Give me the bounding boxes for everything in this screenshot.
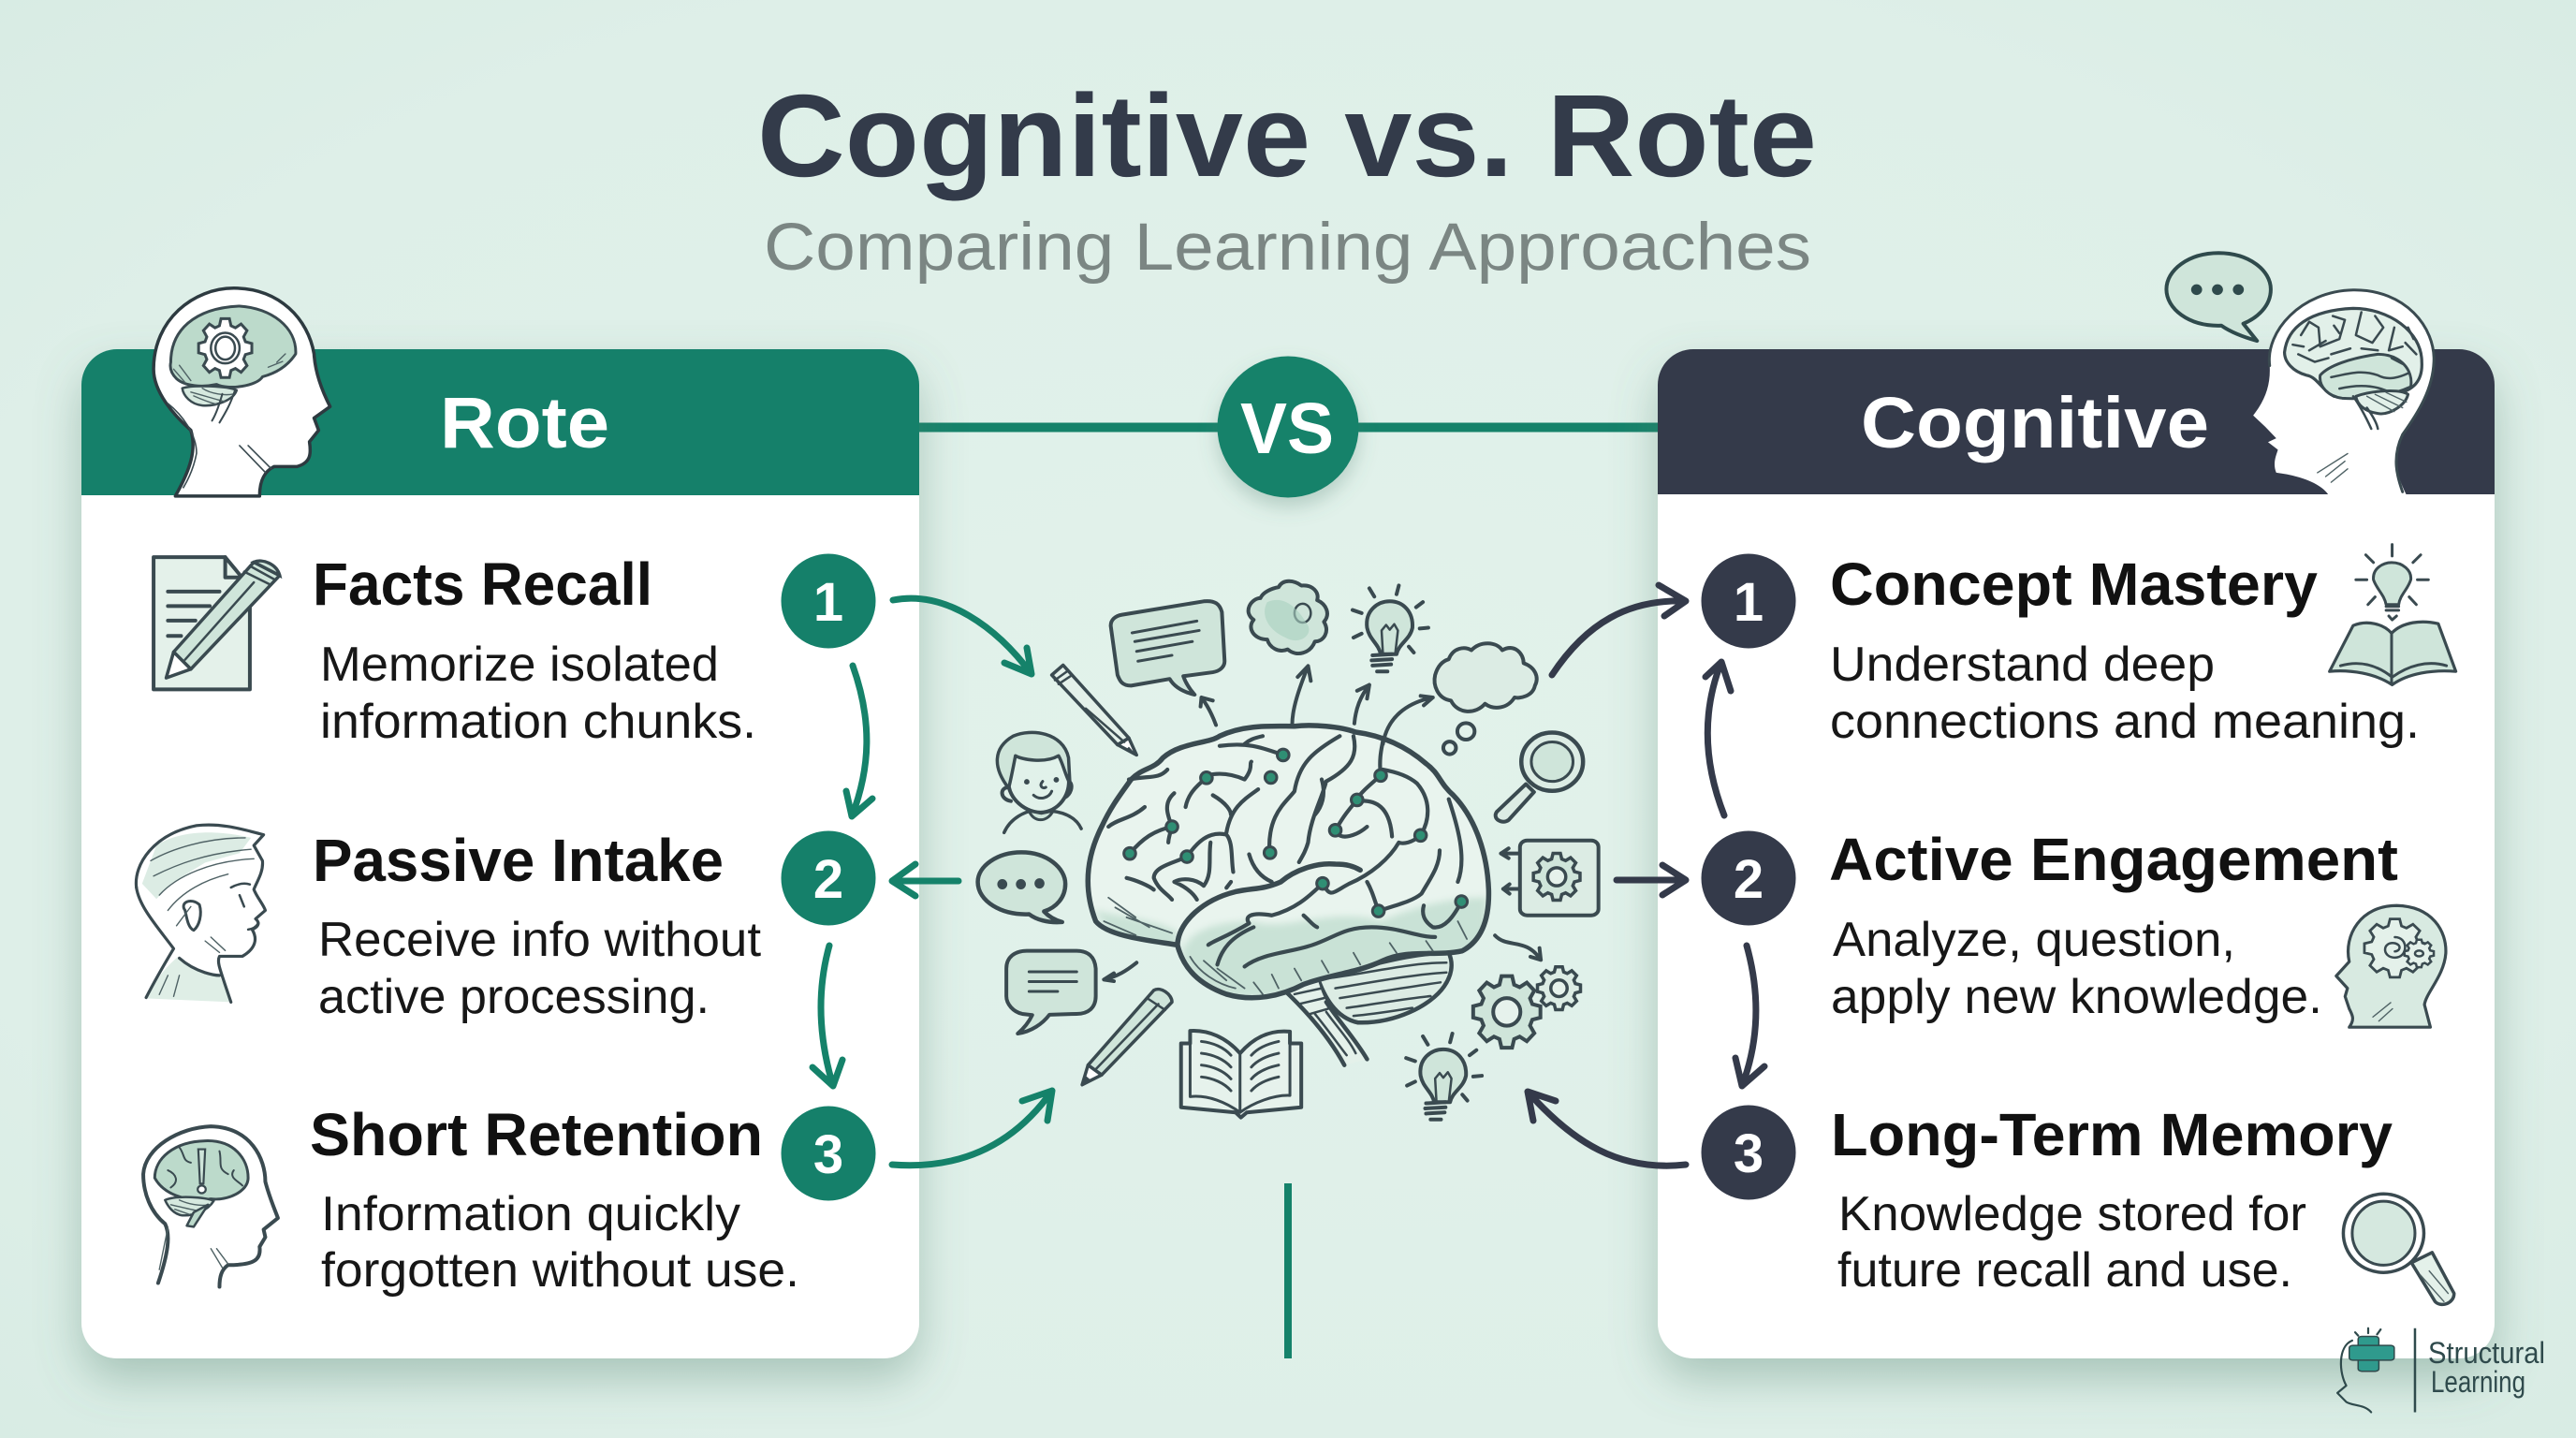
step badge 3 [1702,1105,1795,1200]
item: long-term memory [1702,1101,2454,1304]
step badge 2 [781,831,876,925]
long-term memory description: future recall and use. [1837,1243,2292,1298]
icon: thought cloud [1435,643,1537,755]
item: facts recall [154,550,876,749]
step badge 1 [781,554,876,648]
cognitive heading: Cognitive [1861,383,2209,463]
icon: pencil lower [1082,990,1172,1085]
arrow: brain to cognitive 2 [1617,865,1686,895]
arrow: brain to rote 2 [892,864,959,896]
icon: speech lines lower [1006,951,1096,1034]
item: short retention [143,1101,876,1298]
small arrows out of brain [1104,666,1541,981]
subtitle: Comparing Learning Approaches [764,211,1811,285]
step badge 2 [1702,831,1795,925]
long-term memory description: Knowledge stored for [1838,1187,2306,1241]
icon: boy profile [136,825,265,1002]
central brain illustration [978,581,1599,1120]
logo: structural learning: Learning [2431,1365,2525,1399]
item: passive intake [136,825,876,1024]
short retention description: forgotten without use. [321,1243,799,1298]
concept mastery description: Understand deep [1830,638,2215,692]
icon: speech note [1111,601,1224,695]
icon: cognitive head with detailed brain [2253,290,2434,495]
step badge 2: 2 [1734,849,1764,910]
short retention description: Information quickly [321,1187,740,1241]
icon: bulb lower [1406,1034,1482,1120]
icon: open book [1181,1031,1301,1118]
arrow: rote 1 to brain [893,598,1032,674]
step badge 3: 3 [813,1124,843,1185]
rote heading: Rote [440,383,609,463]
passive intake description: active processing. [318,970,710,1024]
facts recall description: information chunks. [320,695,756,749]
facts recall heading: Facts Recall [313,550,652,618]
arrow: rote 1 to 2 [846,666,872,816]
cognitive header bar [1658,349,2495,494]
icon: gear card [1520,841,1599,916]
arrow: cognitive 2 to 3 [1735,946,1764,1086]
active engagement description: Analyze, question, [1833,913,2235,967]
long-term memory description [1837,1187,2306,1298]
arrow: rote 2 to 3 [812,946,842,1086]
facts recall description: Memorize isolated [320,638,719,692]
active engagement description: apply new knowledge. [1831,970,2322,1024]
passive intake heading: Passive Intake [313,827,724,894]
icon: pencil upper [1052,665,1136,755]
concept mastery description: connections and meaning. [1830,695,2420,749]
passive intake description: Receive info without [318,913,762,967]
icon: bulb over open book [2330,545,2456,684]
step badge 1 [1702,554,1795,648]
panel: rote [81,288,919,1358]
icon: bulb upper [1353,585,1428,671]
arrow: cognitive 3 to brain [1528,1092,1686,1166]
step badge 3: 3 [1734,1123,1764,1184]
icon: gears pair [1473,967,1580,1048]
brain cerebrum [1088,726,1488,998]
icon: head with gears [2336,905,2446,1027]
brain stem [1283,976,1367,1065]
icon: boy face [997,732,1081,832]
short retention description [321,1187,799,1298]
logo: structural learning: Structural [2428,1336,2545,1370]
item: active engagement [1702,826,2446,1027]
icon: rote head with gear brain [154,288,330,496]
concept mastery heading: Concept Mastery [1830,550,2318,618]
bottom centre divider [1284,1183,1292,1358]
icon: speech bubble [2166,253,2271,341]
passive intake description [318,913,762,1024]
item: concept mastery [1702,545,2456,749]
step badge 1: 1 [1734,572,1764,633]
icon: blob thought [1249,581,1327,653]
brain cerebellum [1317,953,1452,1022]
active engagement heading: Active Engagement [1829,826,2398,893]
title: Cognitive vs. Rote [757,71,1817,201]
connector line behind vs badge [917,423,1659,433]
rote header bar [81,349,919,495]
short retention heading: Short Retention [310,1101,763,1168]
arrow: brain to cognitive 1 [1552,585,1686,675]
icon: magnifying glass [2343,1194,2454,1304]
arrow: rote 3 to brain [892,1091,1052,1166]
icon: brain head with exclamation [143,1126,278,1287]
long-term memory heading: Long-Term Memory [1831,1101,2393,1168]
concept mastery description [1830,638,2420,749]
arrow: cognitive 2 to 1 [1705,662,1731,815]
panel: cognitive [1658,253,2495,1358]
active engagement description [1831,913,2322,1024]
step badge 3 [781,1107,876,1200]
vs badge: VS [1240,389,1334,469]
vs badge [1217,356,1359,498]
icon: chat bubble dots [978,852,1065,922]
icon: document and pencil [154,557,280,689]
facts recall description [320,638,756,749]
logo: structural learning [2337,1328,2545,1412]
icon: magnifier [1496,732,1583,822]
step badge 2: 2 [813,849,843,910]
brain nodes [1124,749,1468,917]
step badge 1: 1 [813,572,843,633]
